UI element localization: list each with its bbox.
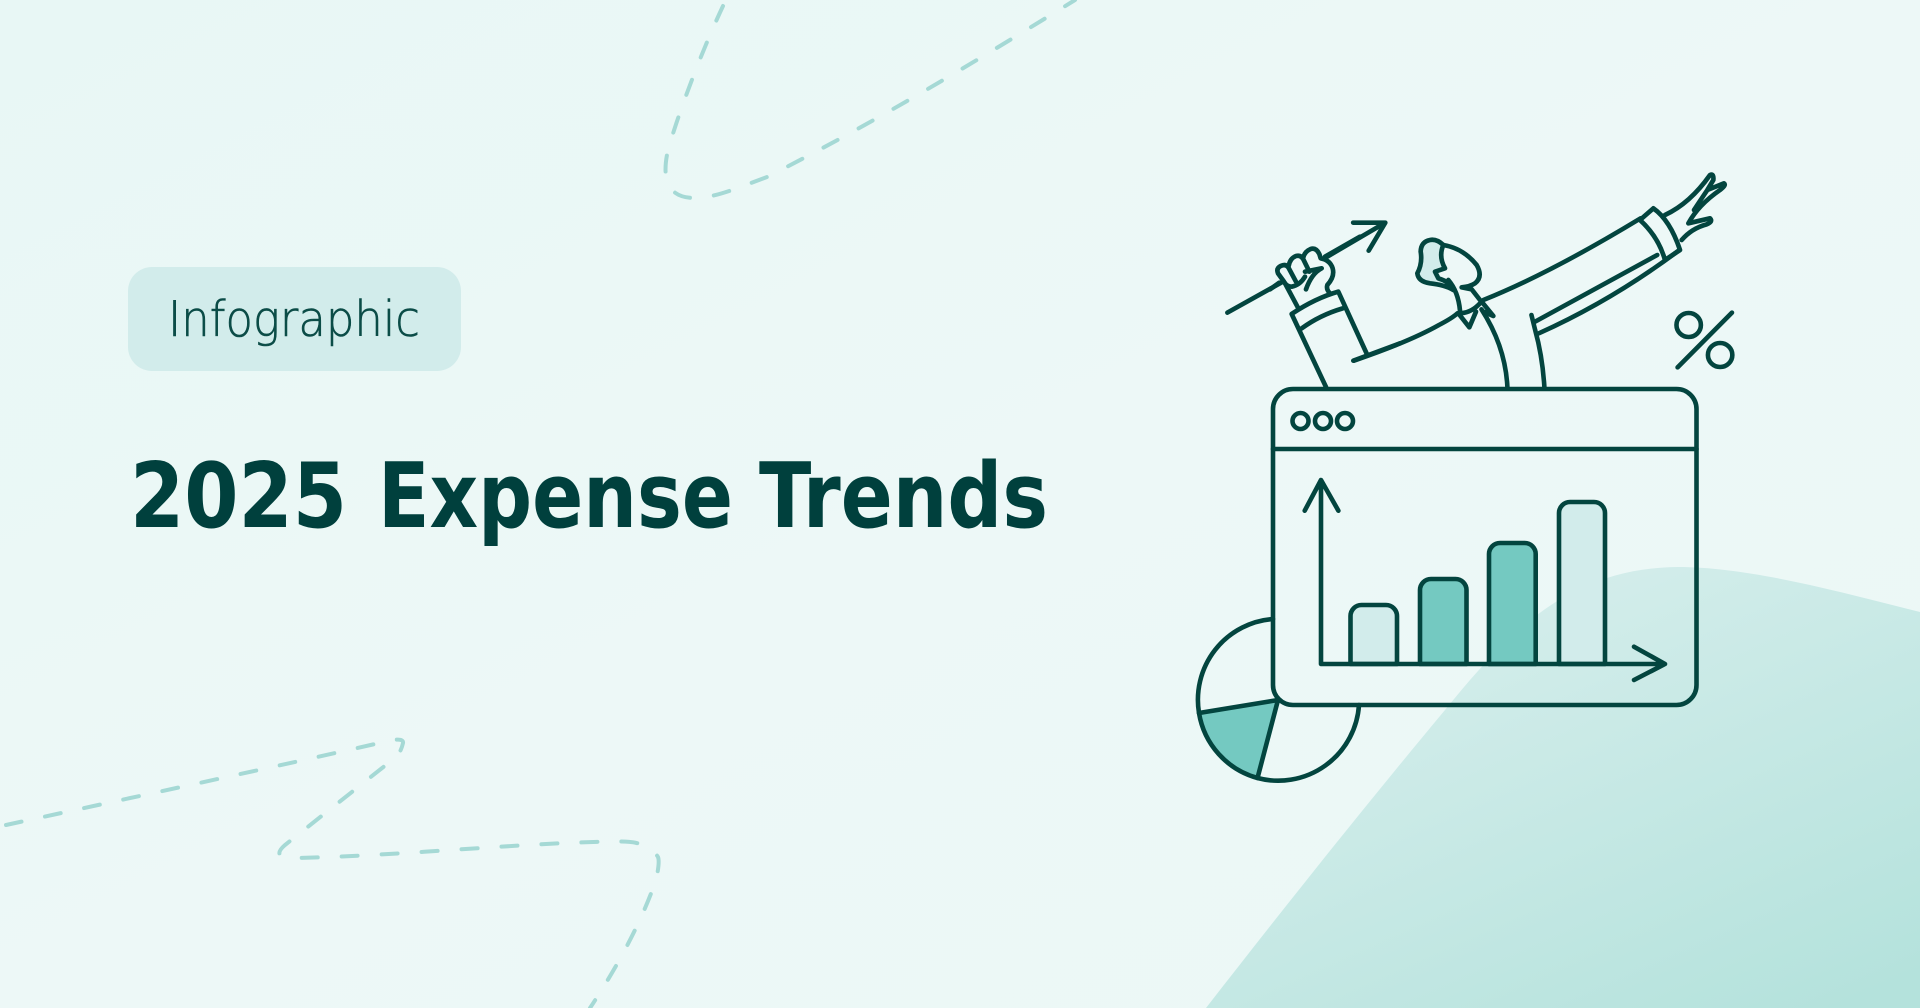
under arm <box>1354 313 1457 361</box>
hand <box>1665 175 1725 240</box>
figure body and arrow <box>1227 218 1732 387</box>
title <box>130 444 1048 549</box>
category pill <box>128 267 461 371</box>
bar chart <box>1305 480 1665 680</box>
face <box>1443 245 1480 311</box>
browser window <box>1273 389 1696 705</box>
torso <box>1482 309 1544 387</box>
percent sign <box>1676 313 1732 367</box>
title: Trends <box>759 444 1048 549</box>
fist <box>1277 249 1333 293</box>
illustration <box>1198 175 1732 781</box>
fist and left sleeve <box>1270 237 1400 387</box>
collar <box>1458 302 1493 327</box>
sleeve <box>1285 283 1400 387</box>
window dots <box>1292 413 1353 429</box>
title: Expense <box>378 444 733 549</box>
pointing hand and cuff <box>1640 175 1725 260</box>
dashed path: top <box>666 0 1075 198</box>
arrow held by figure <box>1227 223 1385 313</box>
cuff <box>1640 208 1680 260</box>
raised arm <box>1483 218 1679 333</box>
pie chart <box>1198 619 1359 781</box>
dashed path: bottom <box>6 740 659 1008</box>
title: 2025 <box>130 444 347 549</box>
category pill: Infographic <box>168 291 420 348</box>
hair <box>1417 240 1453 290</box>
background blob <box>1206 567 1920 1008</box>
head <box>1417 240 1493 327</box>
